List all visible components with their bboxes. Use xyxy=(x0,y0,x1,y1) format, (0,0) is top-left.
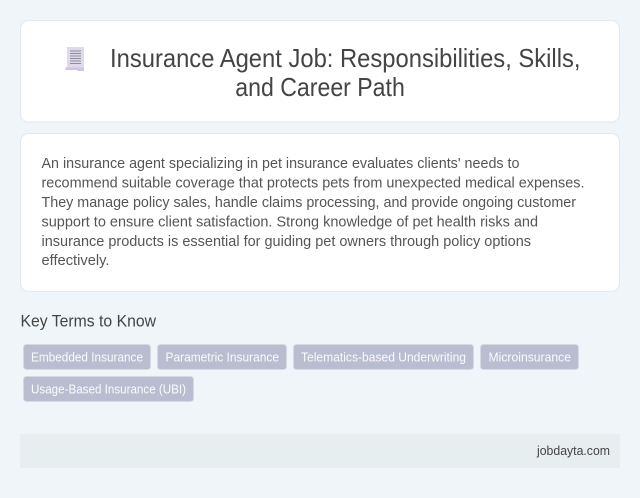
heading: key terms: Key Terms to Know xyxy=(20,312,156,330)
tag: parametric insurance xyxy=(158,344,286,370)
description text: support to ensure client satisfaction. Strong knowledge of pet health risks and xyxy=(42,214,538,230)
description text: effectively. xyxy=(42,252,110,269)
tag: embedded insurance: Embedded Insurance xyxy=(31,350,143,364)
tag: microinsurance: Microinsurance xyxy=(488,350,571,364)
title: Insurance Agent Job: Responsibilities, Skills, xyxy=(110,43,580,73)
tag: microinsurance xyxy=(480,344,578,370)
description text: insurance products is essential for guiding pet owners through policy options xyxy=(42,233,531,250)
description text xyxy=(42,155,584,269)
title: and Career Path xyxy=(235,72,405,102)
tag: telematics-based underwriting xyxy=(294,344,474,370)
tag: telematics-based underwriting: Telematics-based Underwriting xyxy=(301,350,466,364)
tag: embedded insurance xyxy=(24,344,150,370)
title xyxy=(110,43,580,102)
tag: usage-based insurance: Usage-Based Insurance (UBI) xyxy=(31,382,186,396)
tag list xyxy=(24,344,578,402)
footer source text: jobdayta.com xyxy=(536,444,610,458)
icon: document scroll xyxy=(65,47,84,71)
tag: usage-based insurance xyxy=(24,376,194,402)
footer xyxy=(20,434,620,468)
panel: description xyxy=(20,134,620,292)
tag: parametric insurance: Parametric Insurance xyxy=(166,350,279,364)
description text: recommend suitable coverage that protects pets from unexpected medical expenses. xyxy=(42,174,584,192)
panel: header xyxy=(20,20,620,122)
description text: They manage policy sales, handle claims processing, and provide ongoing customer xyxy=(42,194,576,211)
description text: An insurance agent specializing in pet insurance evaluates clients' needs to xyxy=(42,155,520,172)
